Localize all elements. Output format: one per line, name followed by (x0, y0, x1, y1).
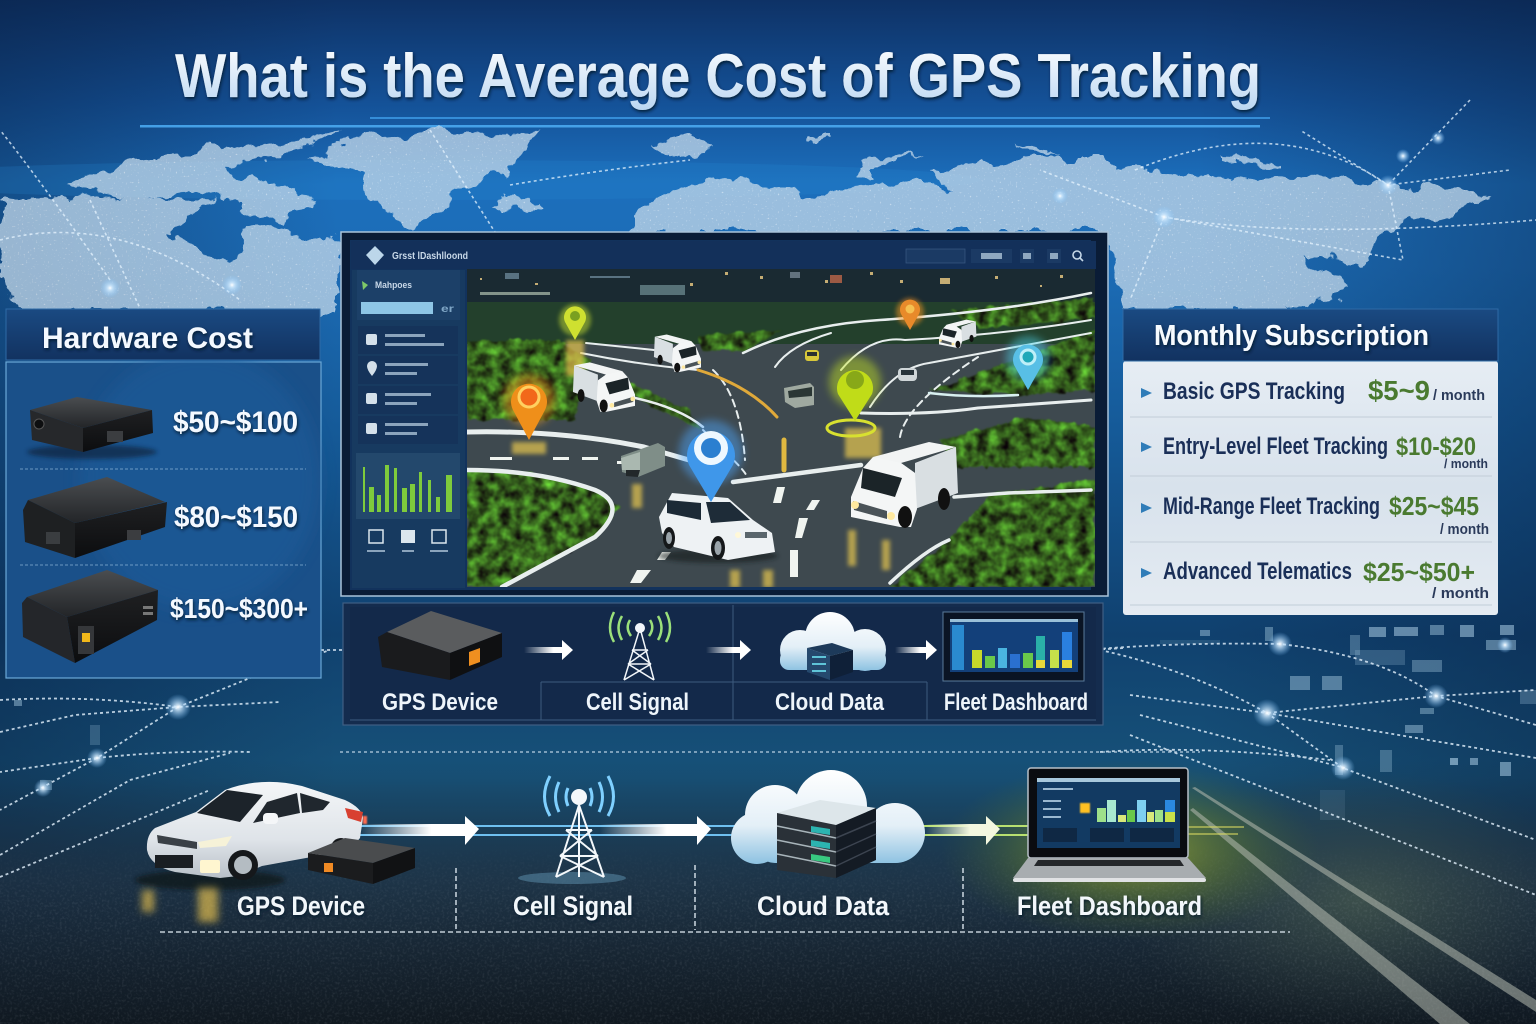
icon: cloud data (780, 612, 886, 680)
dashboard sidebar (352, 270, 465, 588)
row: advanced telematics: $25~$50+ (1363, 557, 1475, 587)
device 3 price row (22, 570, 308, 663)
device 2 price row: $80~$150 (174, 501, 298, 534)
network lines lower (0, 644, 1536, 895)
label: gps device: GPS Device (382, 689, 498, 716)
label: cloud data bottom: Cloud Data (757, 891, 890, 921)
sidebar bar chart (356, 453, 460, 519)
title: What is the Average Cost of GPS Tracking (175, 42, 1261, 111)
row: mid-range fleet tracking: $25~$45 (1389, 491, 1479, 521)
panel: hardware cost (6, 309, 321, 678)
dashboard sidebar: er (441, 304, 454, 315)
row: basic gps tracking: Basic GPS Tracking (1163, 378, 1345, 405)
label: cell signal: Cell Signal (586, 689, 689, 716)
row: mid-range fleet tracking (1141, 491, 1489, 538)
label: fleet dashboard bottom: Fleet Dashboard (1017, 891, 1202, 921)
vehicles (573, 320, 976, 563)
heading: hardware cost (6, 309, 320, 360)
label: fleet dashboard: Fleet Dashboard (944, 689, 1088, 716)
label: cloud data: Cloud Data (775, 689, 885, 716)
arrow 2 (706, 640, 751, 660)
map pin: cyan (1006, 336, 1050, 390)
heading: monthly subscription: Monthly Subscription (1154, 320, 1429, 352)
row: basic gps tracking: / month (1433, 387, 1485, 404)
icon: cloud with servers (731, 770, 925, 878)
decorative data blocks (14, 625, 1536, 820)
vehicle: white suv (658, 493, 778, 563)
dashboard sidebar: Mahpoes (375, 280, 412, 291)
row: mid-range fleet tracking: Mid-Range Fleet Tracking (1163, 493, 1380, 520)
row: entry-level fleet tracking: / month (1444, 456, 1488, 471)
dashboard map scene (467, 269, 1095, 588)
icon: cell tower (610, 612, 670, 680)
icon: cell tower large (518, 776, 626, 884)
network lines over map (0, 100, 1536, 330)
icon: gps device (378, 611, 502, 680)
world map (0, 132, 1490, 312)
arrow 1 (524, 640, 573, 660)
arrow: cloud to dashboard (925, 816, 1000, 845)
device 1 price row: $50~$100 (173, 406, 298, 439)
row: advanced telematics (1141, 557, 1489, 602)
green islands (467, 298, 1095, 587)
row: entry-level fleet tracking: Entry-Level Fleet Tracking (1163, 433, 1388, 460)
row: advanced telematics: Advanced Telematics (1163, 558, 1352, 585)
bottom data stream lines (360, 825, 1040, 836)
panel: dashboard screen (341, 232, 1108, 596)
panel: monthly subscription (1123, 309, 1498, 615)
road lines right (1188, 787, 1536, 1024)
map pin: orange small (896, 298, 924, 330)
device 3 price row: $150~$300+ (170, 593, 308, 624)
row: entry-level fleet tracking: $10-$20 (1396, 433, 1476, 461)
map pin: yellow-green small (559, 304, 591, 340)
icon: laptop (1013, 768, 1206, 882)
row: basic gps tracking: $5~9 (1368, 375, 1430, 406)
arrow: gps to cell (360, 816, 479, 845)
row: advanced telematics: / month (1432, 585, 1489, 602)
row: mid-range fleet tracking: / month (1440, 521, 1489, 538)
heading: hardware cost: Hardware Cost (42, 322, 253, 355)
bottom flow dashed guides (160, 865, 1290, 932)
label: cell signal bottom: Cell Signal (513, 891, 633, 921)
decorative title rules (140, 117, 1270, 128)
map pin: green (827, 356, 881, 436)
icon: fleet dashboard screen (943, 612, 1084, 681)
car with gps device (135, 782, 415, 922)
device 1 price row (27, 397, 298, 459)
road lines (467, 293, 1091, 587)
arrow 3 (895, 640, 937, 660)
map pin: blue (679, 420, 743, 502)
row: entry-level fleet tracking (1141, 433, 1488, 471)
heading: monthly subscription (1123, 309, 1498, 361)
dashboard header: Grsst lDashlloond (392, 250, 468, 262)
arrow: cell to cloud (600, 816, 711, 845)
panel: flow strip (343, 603, 1103, 725)
label: gps device bottom: GPS Device (237, 891, 365, 921)
device 2 price row (23, 477, 298, 558)
map pin: orange (503, 374, 555, 440)
reflections (512, 340, 890, 588)
dashboard header (351, 241, 1096, 269)
row: basic gps tracking (1141, 375, 1485, 406)
